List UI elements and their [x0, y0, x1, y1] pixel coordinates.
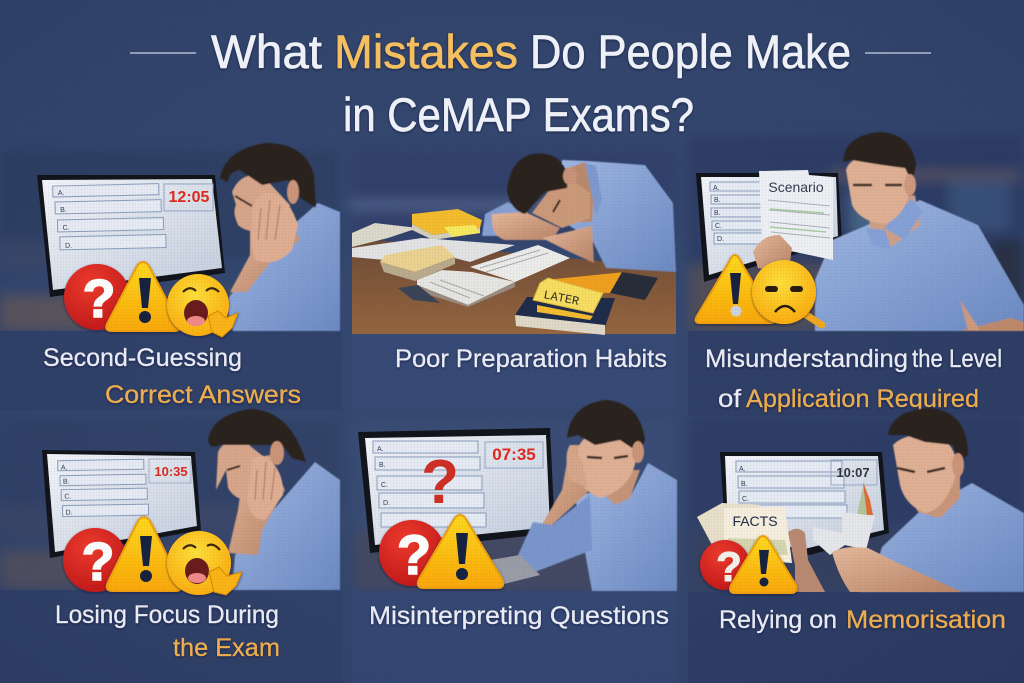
caption: second-guessing: Second-Guessing	[43, 344, 242, 372]
monitor: D.	[66, 509, 73, 517]
caption: second-guessing: Correct Answers	[105, 381, 301, 409]
icon: question mark: ?	[397, 523, 431, 586]
monitor: C.	[715, 223, 722, 230]
later book and note: LATER	[542, 288, 580, 309]
monitor: 10:35	[154, 464, 188, 479]
icon: magnifier handle	[803, 313, 822, 325]
caption: memorisation: Relying on	[719, 606, 837, 634]
panel: poor preparation	[352, 153, 676, 335]
monitor: B.	[741, 481, 748, 488]
icon: question mark	[64, 264, 130, 330]
caption: misunderstanding: Application Required	[746, 385, 979, 413]
icon: warning	[418, 515, 503, 588]
facts cards	[697, 503, 792, 563]
panel: losing focus	[42, 409, 340, 595]
monitor: C.	[381, 482, 388, 489]
monitor: 07:35	[492, 445, 536, 464]
monitor: B.	[63, 479, 70, 486]
panel: memorisation	[697, 408, 1024, 593]
books and papers	[352, 209, 570, 307]
monitor	[720, 452, 889, 555]
monitor: C.	[63, 225, 70, 232]
hand	[753, 235, 792, 270]
icon: warning	[696, 255, 775, 323]
caption: memorisation	[719, 606, 1006, 634]
caption: misunderstanding: of	[718, 385, 741, 413]
monitor: A.	[377, 446, 384, 453]
scenario paper	[759, 170, 833, 260]
icon: frowning face	[752, 260, 816, 324]
monitor: 10:07	[836, 465, 870, 480]
title rules	[130, 52, 931, 54]
icon: yawning face	[167, 531, 242, 595]
monitor: 12:05	[169, 189, 210, 206]
panel: second-guessing	[37, 143, 340, 337]
monitor: B.	[60, 207, 67, 214]
caption: misunderstanding: the Level	[912, 345, 1002, 373]
desk	[352, 238, 676, 334]
blurred library backdrop	[0, 135, 1024, 592]
icon: warning	[107, 517, 181, 591]
icon: yawning face	[167, 274, 238, 337]
panel: misinterpreting	[358, 400, 677, 591]
person	[220, 143, 340, 331]
hands	[832, 547, 962, 592]
caption: misinterpreting: Misinterpreting Questions	[369, 602, 669, 630]
caption strips	[0, 331, 1024, 683]
title	[211, 25, 851, 141]
caption: second-guessing	[43, 344, 301, 409]
person	[815, 132, 1024, 331]
facts cards: FACTS	[732, 513, 778, 529]
icon: warning	[106, 262, 180, 331]
monitor: A.	[713, 185, 720, 192]
caption: losing focus	[55, 601, 280, 662]
caption: misunderstanding	[705, 345, 1002, 413]
monitor	[37, 175, 225, 297]
monitor	[358, 428, 555, 553]
person	[845, 408, 1024, 592]
title: Do People Make	[530, 25, 851, 78]
caption: losing focus: the Exam	[173, 634, 280, 662]
monitor: D.	[383, 500, 390, 507]
icon: question mark: ?	[716, 543, 742, 590]
keyboard	[490, 555, 540, 585]
title: What	[211, 25, 322, 78]
title: Mistakes	[334, 25, 518, 78]
monitor: D.	[65, 243, 72, 250]
monitor: D.	[717, 236, 724, 243]
caption: misunderstanding: Misunderstanding	[705, 345, 908, 373]
monitor: A.	[61, 465, 68, 472]
icon: question mark	[700, 540, 750, 590]
person	[208, 409, 340, 590]
paper note	[813, 512, 875, 555]
panel: misunderstanding	[696, 132, 1024, 331]
monitor	[696, 173, 842, 282]
monitor: C.	[64, 494, 71, 501]
monitor: C.	[742, 496, 749, 503]
title: in CeMAP Exams?	[343, 88, 694, 141]
monitor: A.	[739, 466, 746, 473]
monitor: A.	[58, 190, 65, 197]
scenario paper: Scenario	[768, 179, 824, 195]
monitor: B.	[714, 197, 721, 204]
icon: question mark: ?	[82, 532, 114, 592]
monitor: B.	[379, 462, 386, 469]
person	[518, 400, 677, 591]
icon: question mark	[63, 528, 127, 592]
caption: losing focus: Losing Focus During	[55, 601, 279, 629]
monitor: B.	[714, 210, 721, 217]
caption: memorisation: Memorisation	[846, 606, 1006, 634]
icon: question mark: ?	[82, 269, 116, 329]
icon: question mark	[379, 520, 445, 586]
person sleeping	[482, 153, 676, 272]
monitor: ?	[421, 448, 459, 517]
monitor	[42, 450, 201, 558]
caption: poor preparation: Poor Preparation Habits	[395, 345, 667, 373]
later book and note	[515, 272, 658, 335]
icon: warning	[730, 536, 796, 593]
